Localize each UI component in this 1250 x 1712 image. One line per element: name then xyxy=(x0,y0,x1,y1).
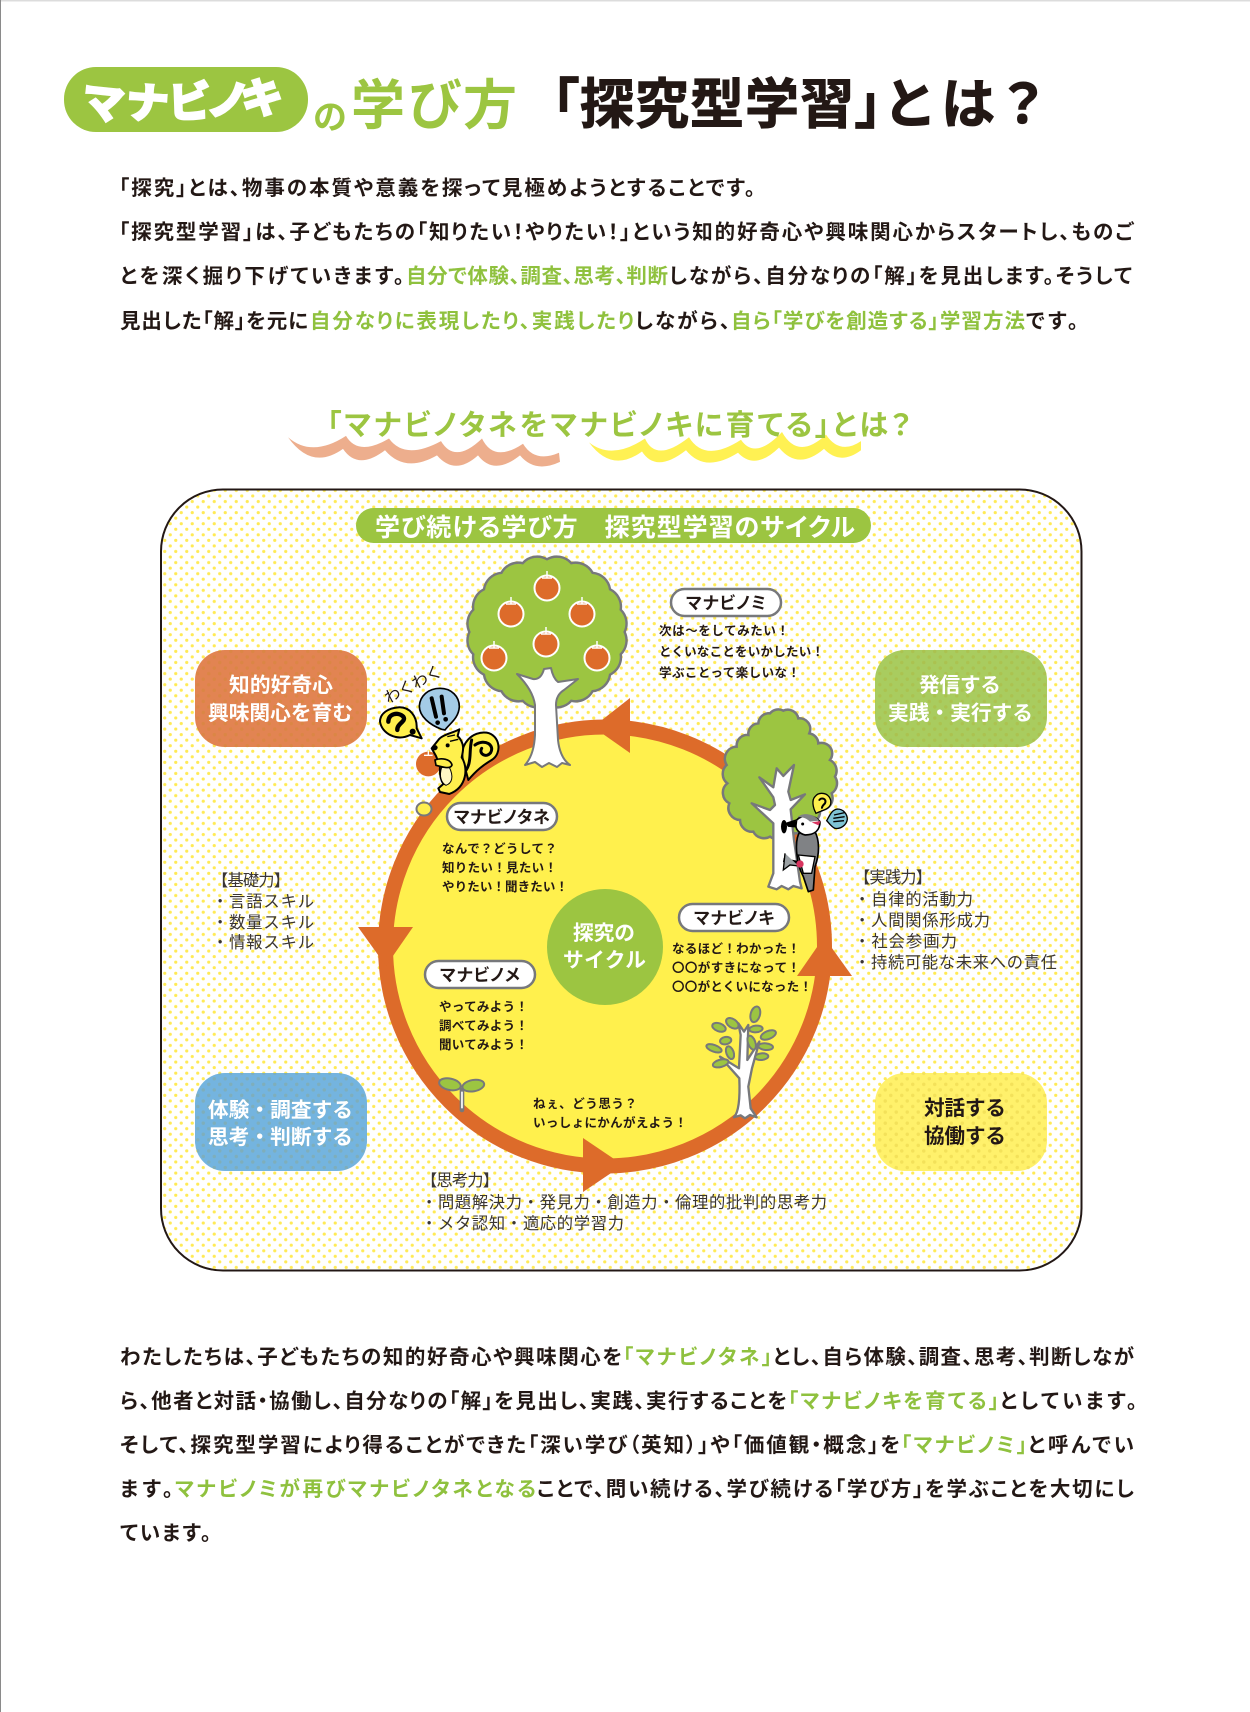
label group: マナビノキ: なるほど！わかった！ xyxy=(672,941,800,956)
closing paragraph: と呼んでい xyxy=(1028,1434,1134,1457)
intro paragraph: です。 xyxy=(1026,310,1078,333)
closing paragraph: 「マナビノミ」 xyxy=(901,1434,1027,1457)
title: 「探究型学習」とは？ xyxy=(552,75,1042,135)
panel heading: 学び続ける学び方 探究型学習のサイクル xyxy=(375,514,855,542)
label group: マナビノタネ: なんで？どうして？ xyxy=(442,841,557,856)
label group: マナビノメ: 聞いてみよう！ xyxy=(439,1038,528,1052)
label group: マナビノミ: とくいなことをいかしたい！ xyxy=(659,645,824,659)
label: わくわく: わくわく xyxy=(381,663,443,708)
closing paragraph: としています。 xyxy=(1000,1390,1137,1413)
title: 「探究型学習」とは？: 「探究型学習」 xyxy=(552,75,882,135)
closing paragraph: ことで、問い続ける、学び続ける「学び方」を学ぶことを大切にし xyxy=(537,1478,1134,1501)
label group: マナビノタネ: やりたい！聞きたい！ xyxy=(442,880,568,894)
title: マナビノキの学び方: 学び方 xyxy=(351,76,517,136)
icon: squirrel with speech bubbles xyxy=(380,688,499,794)
panel: 探究型学習のサイクル xyxy=(161,490,1082,1270)
list: 思考力 xyxy=(421,1172,827,1233)
cycle ring with arrows xyxy=(358,698,852,1192)
box: 知的好奇心 xyxy=(195,650,367,747)
label group: マナビノミ xyxy=(659,589,824,680)
closing paragraph: ています。 xyxy=(120,1522,211,1545)
intro paragraph: しながら、自分なりの「解」を見出します。そうして xyxy=(669,264,1132,288)
intro paragraph xyxy=(119,177,1135,333)
label group: マナビノキ: 〇〇がすきになって！ xyxy=(672,960,800,975)
intro paragraph: とを深く掘り下げていきます。 xyxy=(120,265,404,288)
title: マナビノキの学び方: ナ xyxy=(126,79,168,128)
closing paragraph: そして、探究型学習により得ることができた「深い学び（英知）」や「価値観・概念」を xyxy=(120,1433,900,1457)
box: 発信する xyxy=(875,650,1047,747)
title: マナビノキの学び方: の xyxy=(313,99,347,137)
label group: マナビノタネ: 知りたい！見たい！ xyxy=(442,860,557,875)
list: 思考力: ・問題解決力・発見力・創造力・倫理的批判的思考力 xyxy=(421,1194,827,1212)
icon: apple tree xyxy=(467,557,627,767)
closing paragraph: ます。 xyxy=(120,1478,173,1501)
title: マナビノキの学び方: ノ xyxy=(208,76,246,125)
label group: マナビノメ: やってみよう！ xyxy=(439,1000,528,1014)
intro paragraph: 「探究」とは、物事の本質や意義を探って見極めようとすることです。 xyxy=(119,177,755,200)
speech text: dialogue xyxy=(533,1096,687,1130)
box: 対話する: 対話する xyxy=(924,1097,1006,1120)
centre circle: 探究のサイクル: 探究の xyxy=(573,922,635,945)
title: マナビノキの学び方: キ xyxy=(239,73,283,125)
subheading with wavy underlines: 「マナビノタネをマナビノキに育てる」とは？ xyxy=(327,409,911,442)
list: 実践力: ・人間関係形成力 xyxy=(854,912,990,930)
list: 思考力: ・メタ認知・適応的学習力 xyxy=(421,1215,624,1233)
intro paragraph: しながら、 xyxy=(635,309,730,333)
list: 実践力: ・自律的活動力 xyxy=(854,891,973,909)
closing paragraph xyxy=(120,1345,1137,1545)
label group: マナビノメ xyxy=(425,961,535,1052)
box: 知的好奇心: 興味関心を育む xyxy=(208,702,353,725)
title: 「探究型学習」とは？: とは？ xyxy=(886,75,1042,135)
label group: マナビノキ xyxy=(672,904,812,994)
list: 実践力: ・持続可能な未来への責任 xyxy=(854,954,1057,972)
list: 基礎力: 【基礎力】 xyxy=(212,872,290,890)
box: 知的好奇心: 知的好奇心 xyxy=(229,674,333,697)
list: 基礎力: ・言語スキル xyxy=(212,893,314,911)
label group: マナビノタネ xyxy=(442,803,568,894)
list: 思考力: 【思考力】 xyxy=(421,1172,499,1190)
closing paragraph: 「マナビノタネ」 xyxy=(623,1346,772,1369)
title: マナビノキの学び方: マ xyxy=(82,78,125,129)
intro paragraph: 自分なりに表現したり、実践したり xyxy=(310,310,634,333)
intro paragraph: 見出した「解」を元に xyxy=(120,310,308,333)
centre circle: 探究のサイクル xyxy=(547,889,663,1005)
box: 発信する: 実践・実行する xyxy=(888,702,1033,725)
closing paragraph: ら、他者と対話・協働し、自分なりの「解」を見出し、実践、実行することを xyxy=(120,1390,787,1413)
label group: マナビノミ: 学ぶことって楽しいな！ xyxy=(659,665,800,680)
list: 実践力: 【実践力】 xyxy=(854,869,932,887)
list: 基礎力 xyxy=(212,872,314,952)
label group: マナビノメ: 調べてみよう！ xyxy=(439,1019,528,1033)
box: 体験・調査する: 体験・調査する xyxy=(208,1099,353,1122)
speech text: dialogue: いっしょにかんがえよう！ xyxy=(533,1115,687,1130)
icon: sprout xyxy=(438,1076,485,1110)
label group: マナビノメ: マナビノメ xyxy=(440,965,520,985)
box: 対話する xyxy=(875,1073,1047,1171)
closing paragraph: とし、自ら体験、調査、思考、判断しなが xyxy=(773,1345,1135,1369)
title: マナビノキの学び方 xyxy=(64,67,517,137)
icon: young tree xyxy=(705,1005,777,1118)
box: 対話する: 協働する xyxy=(924,1125,1006,1148)
icon: small thought bubble xyxy=(416,802,432,816)
box: 体験・調査する: 思考・判断する xyxy=(208,1126,353,1149)
speech text: dialogue: ねぇ、どう思う？ xyxy=(533,1096,637,1111)
label group: マナビノミ: 次は〜をしてみたい！ xyxy=(659,623,789,638)
list: 実践力 xyxy=(854,869,1057,972)
label group: マナビノタネ: マナビノタネ xyxy=(454,807,550,827)
intro paragraph: 「探究型学習」は、子どもたちの「知りたい！やりたい！」という知的好奇心や興味関心からスタートし、ものご xyxy=(119,220,1135,244)
icon: big tree with woodpecker xyxy=(723,709,847,892)
closing paragraph: 「マナビノキを育てる」 xyxy=(788,1390,999,1413)
list: 実践力: ・社会参画力 xyxy=(854,933,957,951)
list: 基礎力: ・情報スキル xyxy=(212,934,314,952)
box: 発信する: 発信する xyxy=(919,674,1001,697)
box: 体験・調査する xyxy=(195,1073,367,1171)
centre circle: 探究のサイクル: サイクル xyxy=(563,949,646,972)
label group: マナビノミ: マナビノミ xyxy=(686,593,766,613)
label group: マナビノキ: マナビノキ xyxy=(694,908,774,928)
title: マナビノキの学び方: ビ xyxy=(169,78,209,127)
intro paragraph: 自ら「学びを創造する」学習方法 xyxy=(731,310,1026,333)
closing paragraph: わたしたちは、子どもたちの知的好奇心や興味関心を xyxy=(120,1346,622,1369)
subheading with wavy underlines xyxy=(288,409,911,466)
label group: マナビノキ: 〇〇がとくいになった！ xyxy=(672,979,812,994)
intro paragraph: 自分で体験、調査、思考、判断 xyxy=(406,265,668,288)
list: 基礎力: ・数量スキル xyxy=(212,914,314,932)
closing paragraph: マナビノミが再びマナビノタネとなる xyxy=(175,1477,536,1501)
